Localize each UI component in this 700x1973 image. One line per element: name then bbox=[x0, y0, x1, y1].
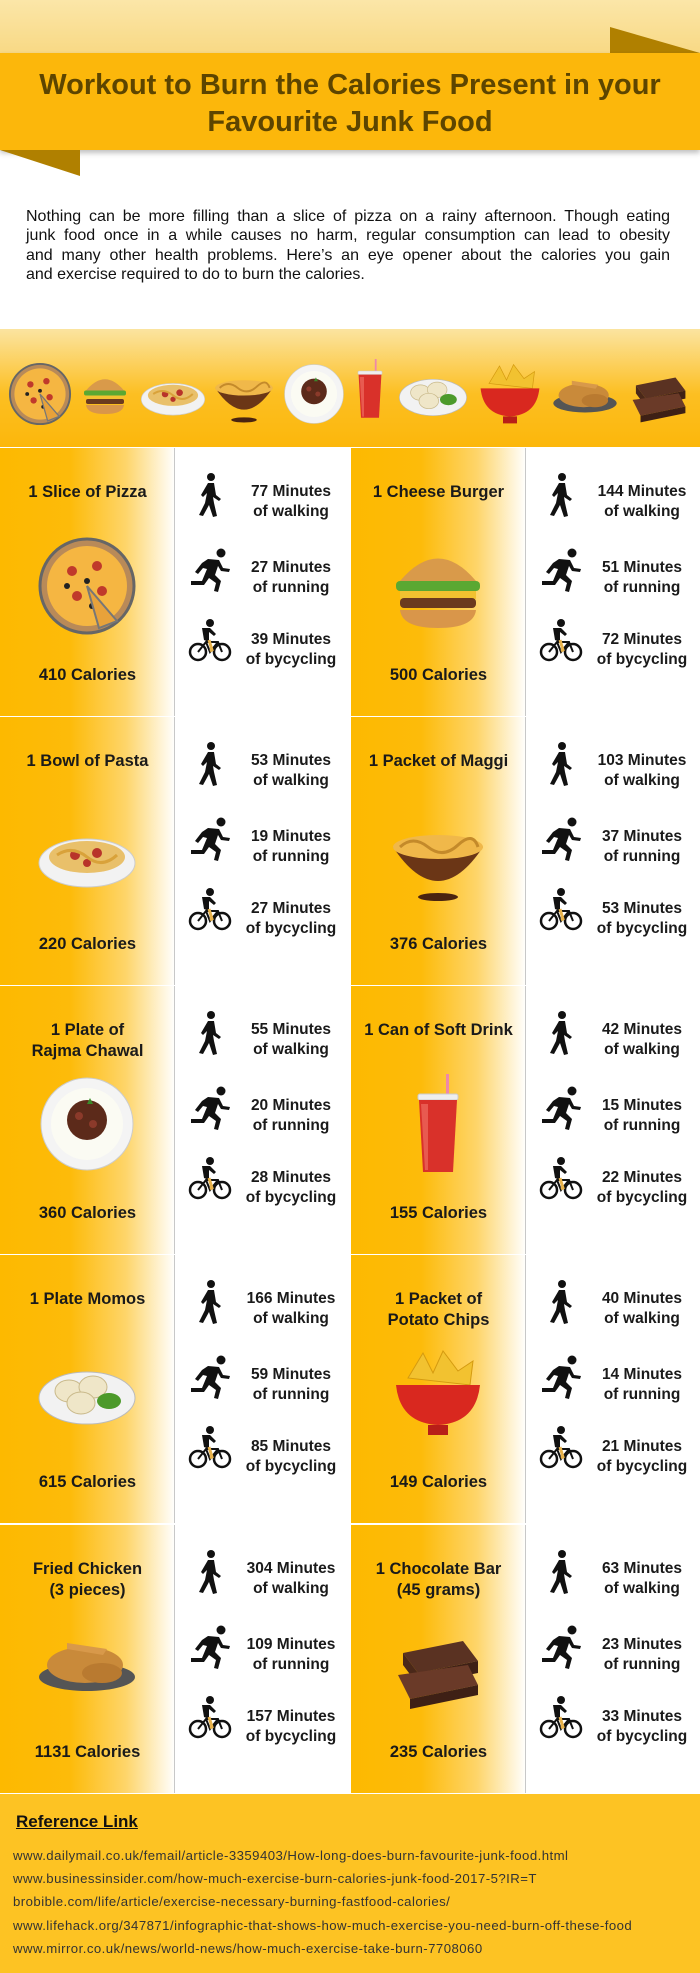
panel: maggi: 376 Calories bbox=[390, 935, 487, 953]
panel: soft drink: 1 Can of Soft Drink bbox=[364, 1021, 513, 1039]
intro paragraph: Nothing can be more filling than a slice of pizza on a rainy afternoon. Though eating bbox=[26, 208, 670, 225]
panel: momos: 615 Calories bbox=[39, 1473, 136, 1491]
panel: momos: of running bbox=[253, 1386, 329, 1403]
panel: maggi: 103 Minutes bbox=[598, 752, 686, 769]
panel: fried chicken: 1131 Calories bbox=[35, 1743, 140, 1761]
panel: burger: 144 Minutes bbox=[598, 483, 686, 500]
panel: momos: of bycycling bbox=[246, 1458, 336, 1475]
panel: fried chicken: (3 pieces) bbox=[49, 1581, 126, 1599]
panel: maggi: of walking bbox=[604, 772, 680, 789]
panel: chips: 14 Minutes bbox=[602, 1366, 682, 1383]
panel: pizza: 27 Minutes bbox=[251, 559, 331, 576]
panel: burger: 51 Minutes bbox=[602, 559, 682, 576]
panel: fried chicken: of bycycling bbox=[246, 1728, 336, 1745]
panel: pasta: of bycycling bbox=[246, 920, 336, 937]
panel: pasta: 27 Minutes bbox=[251, 900, 331, 917]
panel: chips: 40 Minutes bbox=[602, 1290, 682, 1307]
panel: fried chicken: 304 Minutes bbox=[247, 1560, 335, 1577]
panel: maggi: of bycycling bbox=[597, 920, 687, 937]
panel: chips: of walking bbox=[604, 1310, 680, 1327]
panel: momos: 85 Minutes bbox=[251, 1438, 331, 1455]
panel: pizza: of walking bbox=[253, 503, 329, 520]
panel: pizza: 410 Calories bbox=[39, 666, 136, 684]
panel: rajma bbox=[0, 986, 350, 1254]
panel: maggi: 37 Minutes bbox=[602, 828, 682, 845]
panel: fried chicken: Fried Chicken bbox=[33, 1560, 142, 1578]
panel: burger: of walking bbox=[604, 503, 680, 520]
reference section bbox=[0, 1794, 700, 1973]
panel: rajma: 1 Plate of bbox=[51, 1021, 124, 1039]
panel: burger: of bycycling bbox=[597, 651, 687, 668]
reference links bbox=[13, 1848, 632, 1956]
panel: chips: of bycycling bbox=[597, 1458, 687, 1475]
panel: chocolate: 235 Calories bbox=[390, 1743, 487, 1761]
panel: burger bbox=[351, 448, 700, 716]
panel: momos: 59 Minutes bbox=[251, 1366, 331, 1383]
panel: pasta: 1 Bowl of Pasta bbox=[27, 752, 148, 770]
panel: chips: 1 Packet of bbox=[395, 1290, 482, 1308]
panel: momos bbox=[0, 1255, 350, 1523]
panel: maggi: of running bbox=[604, 848, 680, 865]
ribbon fold top right bbox=[610, 27, 700, 53]
ribbon fold bottom left bbox=[0, 150, 80, 176]
header background bbox=[0, 0, 700, 53]
panel: rajma: 20 Minutes bbox=[251, 1097, 331, 1114]
panel: soft drink: of bycycling bbox=[597, 1189, 687, 1206]
reference links: www.mirror.co.uk/news/world-news/how-much-exercise-take-burn-7708060 bbox=[13, 1941, 483, 1956]
panel: soft drink bbox=[351, 986, 700, 1254]
panel: maggi: 1 Packet of Maggi bbox=[369, 752, 508, 770]
panel: rajma: 55 Minutes bbox=[251, 1021, 331, 1038]
intro paragraph: junk food once in a while causes no harm, regular consumption can lead to obesity bbox=[26, 227, 670, 244]
panel: fried chicken: of walking bbox=[253, 1580, 329, 1597]
panel: rajma: 360 Calories bbox=[39, 1204, 136, 1222]
strip icons bbox=[8, 359, 686, 425]
panel: rajma: of walking bbox=[253, 1041, 329, 1058]
intro paragraph bbox=[26, 208, 670, 283]
reference links: www.dailymail.co.uk/femail/article-3359403/How-long-does-burn-favourite-junk-food.html bbox=[13, 1848, 568, 1863]
panel: rajma: Rajma Chawal bbox=[32, 1042, 143, 1060]
panel: pizza: of bycycling bbox=[246, 651, 336, 668]
panel: momos: 1 Plate Momos bbox=[30, 1290, 145, 1308]
title banner: Favourite Junk Food bbox=[207, 106, 493, 138]
panel: chocolate: 33 Minutes bbox=[602, 1708, 682, 1725]
panel: chips: of running bbox=[604, 1386, 680, 1403]
panel: pasta bbox=[0, 717, 350, 985]
panel: chips: Potato Chips bbox=[388, 1311, 489, 1329]
panel: pizza: 77 Minutes bbox=[251, 483, 331, 500]
panel: pasta: 53 Minutes bbox=[251, 752, 331, 769]
panel: pasta: 220 Calories bbox=[39, 935, 136, 953]
panel: chocolate bbox=[351, 1525, 700, 1793]
panel: chocolate: of bycycling bbox=[597, 1728, 687, 1745]
panel: pasta: 19 Minutes bbox=[251, 828, 331, 845]
panel: burger: 72 Minutes bbox=[602, 631, 682, 648]
panel: chocolate: 1 Chocolate Bar bbox=[376, 1560, 501, 1578]
panel: burger: of running bbox=[604, 579, 680, 596]
panel: chocolate: of running bbox=[604, 1656, 680, 1673]
panel: soft drink: 42 Minutes bbox=[602, 1021, 682, 1038]
panel: chocolate: 23 Minutes bbox=[602, 1636, 682, 1653]
panel: rajma: of running bbox=[253, 1117, 329, 1134]
panel: maggi bbox=[351, 717, 700, 985]
food strip bbox=[0, 329, 700, 447]
reference links: www.lifehack.org/347871/infographic-that-shows-how-much-exercise-you-need-burn-off-these-food bbox=[13, 1918, 632, 1933]
reference links: www.businessinsider.com/how-much-exercise-burn-calories-junk-food-2017-5?IR=T bbox=[13, 1871, 537, 1886]
panel: chips: 21 Minutes bbox=[602, 1438, 682, 1455]
panel: momos: 166 Minutes bbox=[247, 1290, 335, 1307]
panel: soft drink: of walking bbox=[604, 1041, 680, 1058]
intro paragraph: and many other health problems. Here’s an eye opener about the calories you gain bbox=[26, 247, 670, 264]
panel: burger: 500 Calories bbox=[390, 666, 487, 684]
panel: maggi: 53 Minutes bbox=[602, 900, 682, 917]
panel: fried chicken: of running bbox=[253, 1656, 329, 1673]
panel: soft drink: 22 Minutes bbox=[602, 1169, 682, 1186]
panel: burger: 1 Cheese Burger bbox=[373, 483, 504, 501]
panel: pasta: of walking bbox=[253, 772, 329, 789]
intro paragraph: and exercise required to do to burn the calories. bbox=[26, 266, 365, 283]
panel: rajma: 28 Minutes bbox=[251, 1169, 331, 1186]
panel: soft drink: 15 Minutes bbox=[602, 1097, 682, 1114]
panel: fried chicken bbox=[0, 1525, 350, 1793]
panel: soft drink: of running bbox=[604, 1117, 680, 1134]
title banner bbox=[0, 53, 700, 150]
panel: chips bbox=[351, 1255, 700, 1523]
panel: pasta: of running bbox=[253, 848, 329, 865]
panel: rajma: of bycycling bbox=[246, 1189, 336, 1206]
panel: momos: of walking bbox=[253, 1310, 329, 1327]
panel: soft drink: 155 Calories bbox=[390, 1204, 487, 1222]
panel: chocolate: 63 Minutes bbox=[602, 1560, 682, 1577]
panel: chocolate: of walking bbox=[604, 1580, 680, 1597]
reference links: brobible.com/life/article/exercise-necessary-burning-fastfood-calories/ bbox=[13, 1894, 450, 1909]
panel: pizza: 1 Slice of Pizza bbox=[28, 483, 147, 501]
panel: fried chicken: 109 Minutes bbox=[247, 1636, 335, 1653]
panel: chocolate: (45 grams) bbox=[397, 1581, 480, 1599]
title banner: Workout to Burn the Calories Present in your bbox=[39, 69, 661, 101]
reference heading: Reference Link bbox=[16, 1812, 138, 1831]
panel: pizza: 39 Minutes bbox=[251, 631, 331, 648]
panel: chips: 149 Calories bbox=[390, 1473, 487, 1491]
panel: pizza: of running bbox=[253, 579, 329, 596]
panel: pizza bbox=[0, 448, 350, 716]
panel: fried chicken: 157 Minutes bbox=[247, 1708, 335, 1725]
